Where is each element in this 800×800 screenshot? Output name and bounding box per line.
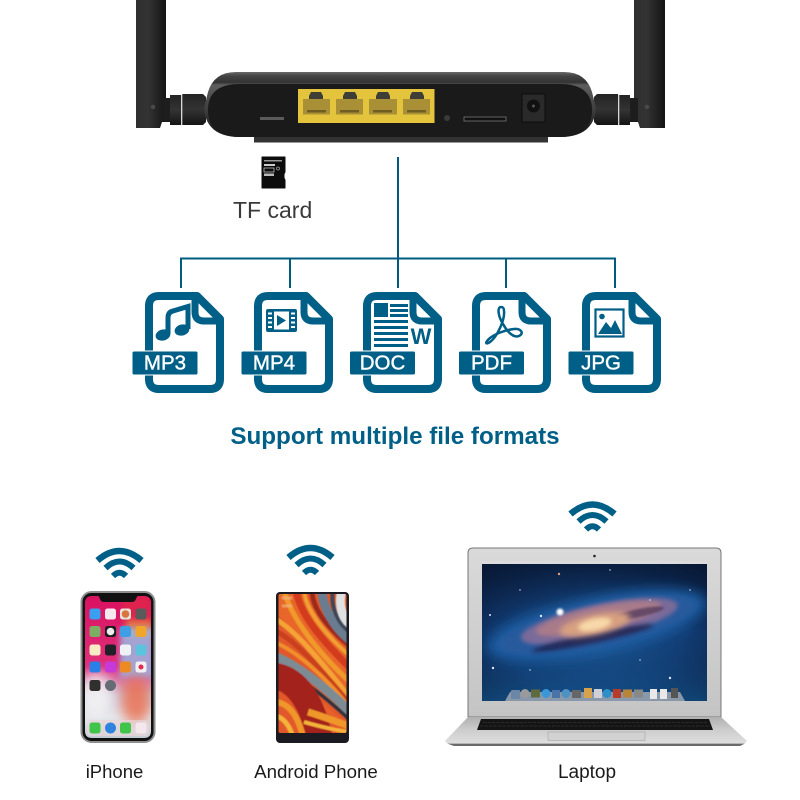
file icon: MP3: MP3 [144,352,186,374]
acrobat glyph [486,307,522,343]
format badge [132,351,198,375]
Android phone [272,590,350,743]
app icons [90,608,146,691]
wifi icon: laptop [570,504,614,530]
laptop lid [468,548,721,717]
TF card icon [262,157,285,188]
format badge [568,351,634,375]
menu bar [482,561,707,564]
base front edge [447,744,745,746]
trackpad [548,732,645,740]
picture glyph [596,310,624,336]
file icon: JPG [568,296,657,389]
yellow ethernet port block [298,89,434,123]
file icon: DOC: DOC [360,352,405,374]
file icon: JPG: JPG [581,352,621,374]
left antenna [136,0,206,128]
W letter: W [411,324,432,349]
keyboard [477,719,713,730]
iPhone label: iPhone [86,761,143,782]
laptop [445,548,747,746]
tf card slot [464,117,506,121]
laptop base [445,717,747,743]
ethernet port 1 [303,92,330,114]
status led [444,115,450,121]
router foot [254,130,548,142]
connector tree lines [181,157,615,288]
wifi icon: Android phone [288,548,332,573]
dock shelf [505,692,685,701]
film strip glyph [266,309,297,332]
ethernet port 2 [336,92,363,114]
format badge [458,351,524,375]
file icon: MP4: MP4 [253,352,295,374]
left usb slot [260,117,284,120]
heading: support multiple file formats: Support multiple file formats [230,423,560,450]
ethernet port 4 [403,92,430,114]
phone frame [276,592,349,743]
document lines glyph [374,303,408,347]
file icon: MP3 [132,296,220,389]
galaxy [482,582,707,666]
wifi icon: iPhone [98,551,142,576]
format badge [241,351,307,375]
music note glyph [168,306,188,334]
home screen [85,596,151,738]
file icon: PDF [458,296,547,389]
iPhone [80,592,154,742]
laptop label: Laptop [558,762,616,783]
dock icons [511,688,678,699]
file icon: MP4 [241,296,329,389]
phone frame [82,592,154,742]
file icon: PDF: PDF [471,352,512,374]
dock [87,720,149,736]
right antenna [594,0,665,128]
router top rim [204,72,596,137]
swirl wallpaper [278,594,346,733]
file icon: DOC [350,296,438,389]
power socket [522,94,545,122]
TF card label: TF card [233,197,312,223]
ethernet port 3 [369,92,397,114]
router front panel [208,84,592,137]
format badge [350,351,416,375]
camera [593,555,596,557]
Android phone label: Android Phone [254,761,378,782]
router rear view [136,0,665,142]
galaxy wallpaper [482,564,712,701]
